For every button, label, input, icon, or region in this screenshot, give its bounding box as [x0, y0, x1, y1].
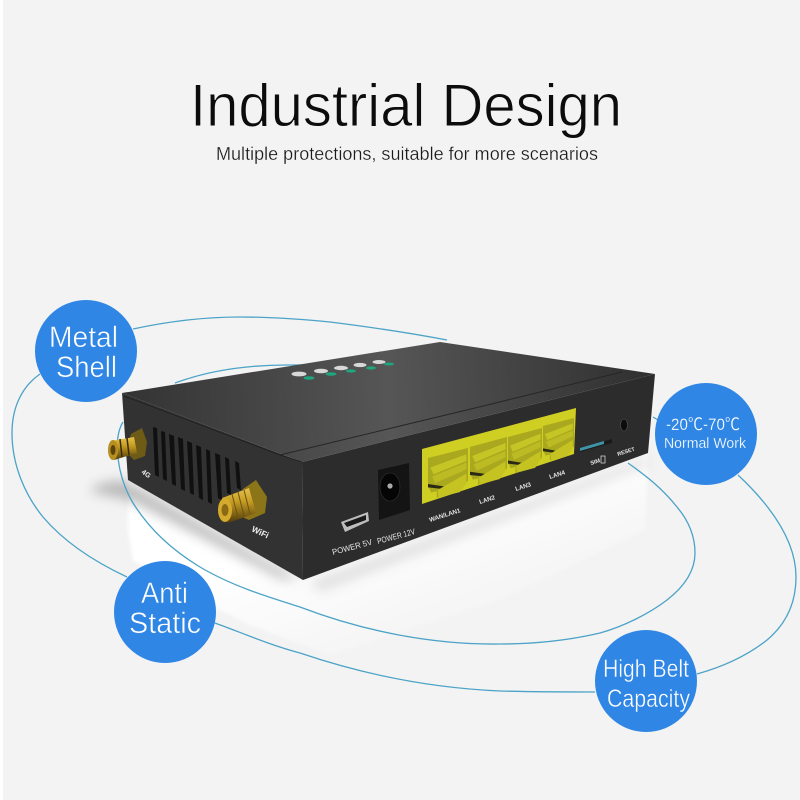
label: POWER 5V: POWER 5V: [331, 537, 374, 557]
label: SIM: SIM: [590, 458, 601, 467]
label: SIM: [590, 456, 605, 467]
badge: Anti Static: Anti: [141, 577, 188, 610]
antenna connector: 4G: [108, 428, 147, 460]
LAN port 4: [543, 418, 574, 462]
LAN port 2: [470, 437, 507, 487]
port labels: WAN/LAN1: [428, 507, 462, 524]
port labels: LAN2: [478, 494, 497, 506]
title: Industrial Design: [190, 72, 622, 139]
badge: Metal Shell: Metal: [49, 321, 118, 354]
badge: temperature: [655, 383, 757, 485]
badge: Anti Static: [114, 561, 216, 663]
yellow ethernet block: [422, 408, 576, 504]
subtitle: Multiple protections, suitable for more scenarios: [216, 144, 598, 164]
orbit lines: [12, 317, 796, 692]
port labels: LAN4: [548, 469, 567, 481]
router left side: [122, 393, 303, 580]
badge: High Belt Capacity: Capacity: [607, 685, 690, 713]
side vents: [153, 427, 241, 504]
label: 4G: 4G: [140, 469, 152, 480]
SIM slot: [580, 439, 612, 452]
LED indicators: [292, 360, 394, 380]
LAN port 3: [508, 428, 542, 475]
label: WiFi: WiFi: [250, 524, 271, 540]
port labels: [428, 469, 567, 524]
badge: High Belt Capacity: High Belt: [603, 655, 689, 683]
badge: Metal Shell: Shell: [56, 351, 117, 384]
reset hole: [620, 419, 628, 431]
badge: Metal Shell: [35, 300, 137, 402]
port labels: LAN3: [514, 481, 533, 493]
router front panel: [302, 374, 655, 580]
badge: temperature: -20℃-70℃: [666, 415, 740, 434]
micro USB port: [341, 512, 369, 532]
floor reflection and shadow: [92, 453, 648, 655]
antenna connector: WiFi: [218, 480, 267, 523]
router: [108, 342, 655, 580]
DC power jack: [378, 463, 410, 520]
label: POWER 12V: POWER 12V: [376, 527, 417, 546]
label: RESET: RESET: [617, 446, 636, 458]
top seam: [280, 372, 622, 455]
LAN port 1: [428, 448, 468, 500]
badge: Anti Static: Static: [129, 607, 201, 640]
router top: [122, 342, 655, 462]
badge: temperature: Normal Work: [664, 436, 747, 452]
badge: High Belt Capacity: [595, 630, 697, 732]
